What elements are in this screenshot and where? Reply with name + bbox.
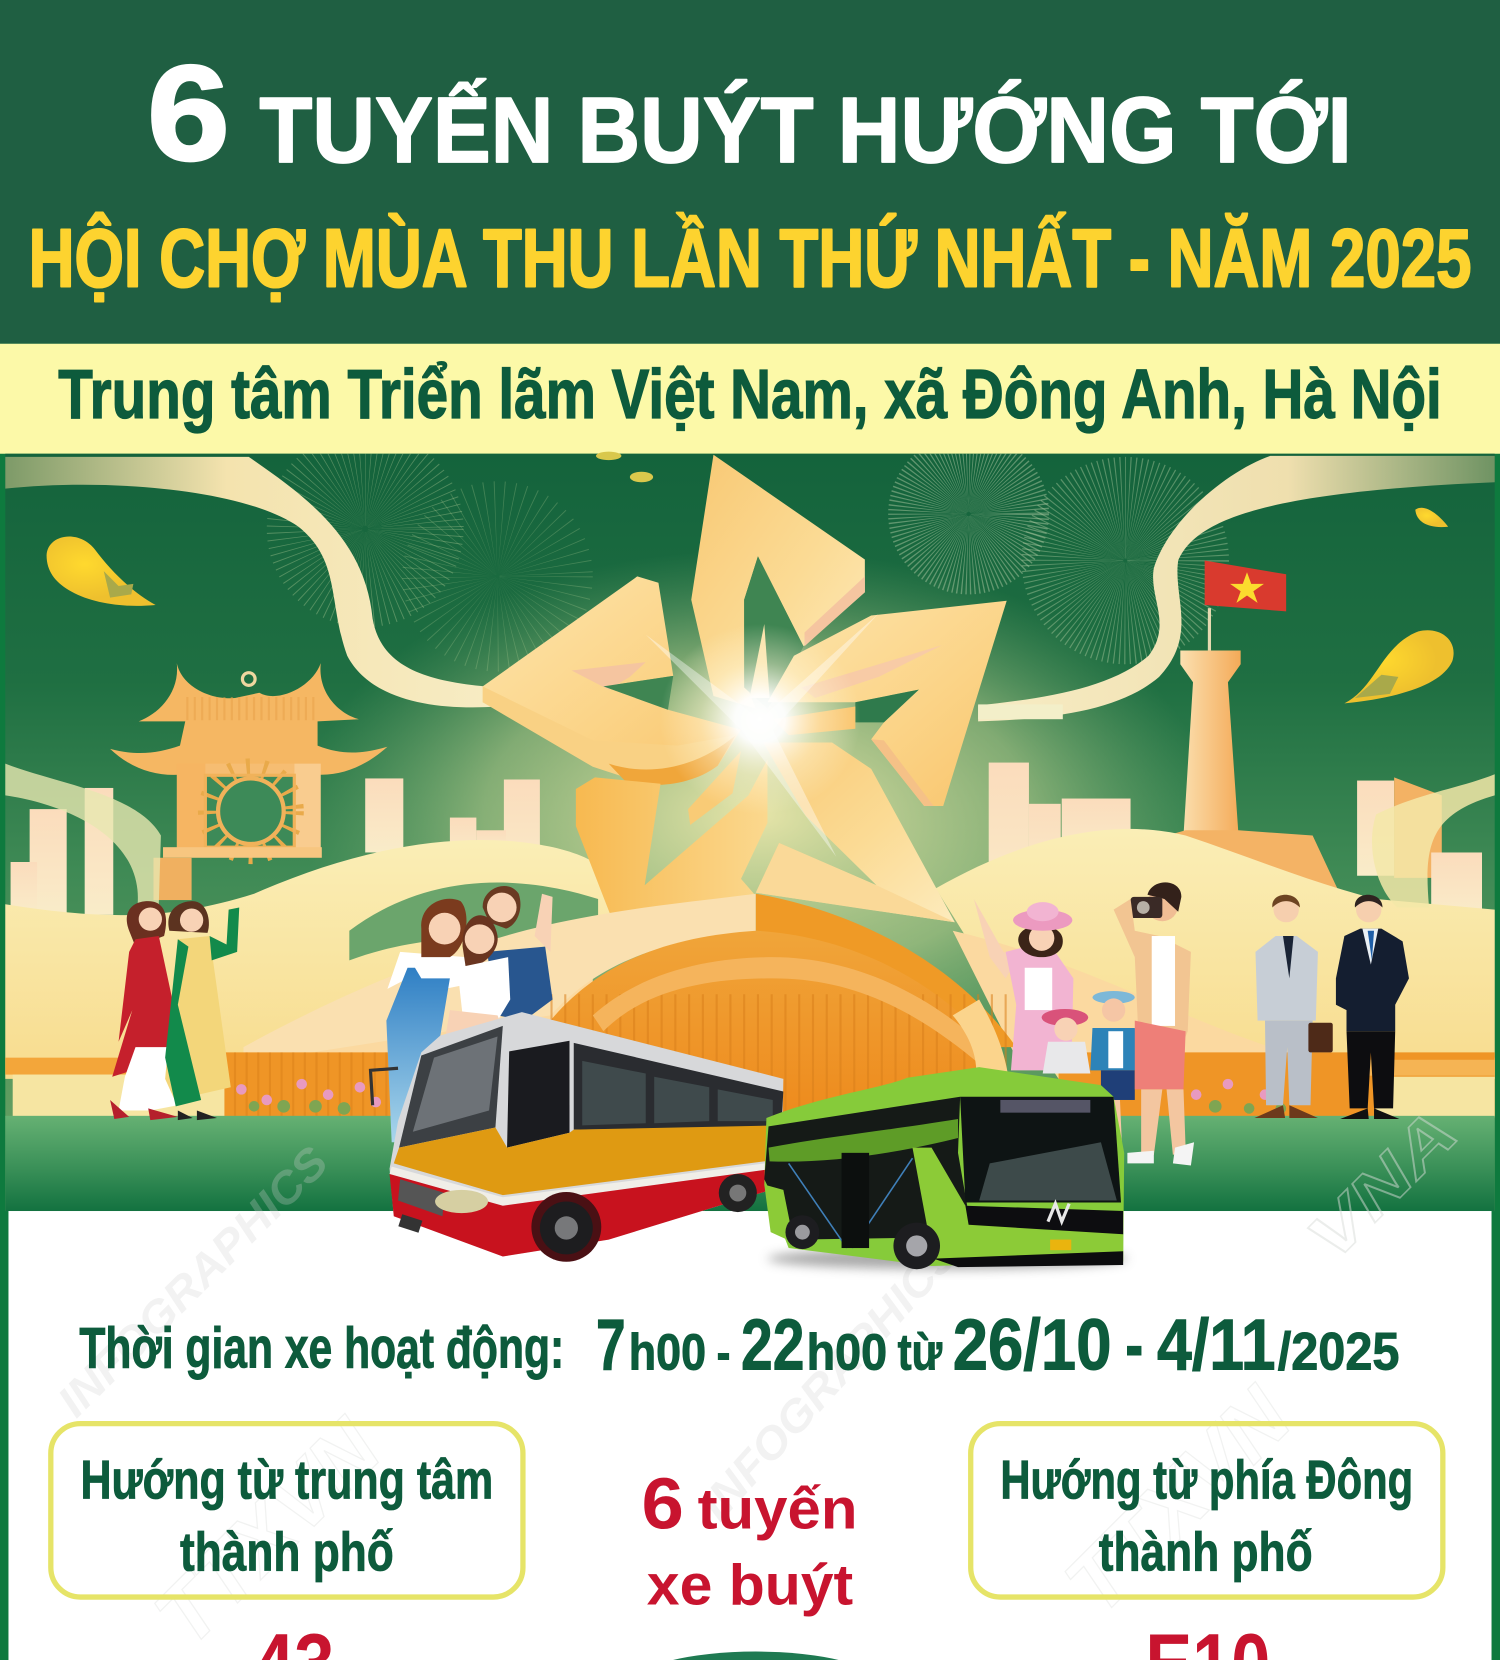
operating time line: 4/11 (1157, 1306, 1276, 1386)
operating time line: Thời gian xe hoạt động: (79, 1317, 564, 1381)
box: from east of city: thành phố (1099, 1521, 1313, 1583)
title: 6 (147, 37, 230, 189)
box: from city center: thành phố (180, 1521, 394, 1583)
watermark: TTXVN (136, 1400, 399, 1660)
watermark: INFOGRAPHICS (691, 1229, 968, 1530)
header band (0, 0, 1500, 344)
watermark: INFOGRAPHICS (49, 1137, 338, 1426)
watermark (49, 1097, 1471, 1660)
people: women in ao dai (110, 901, 239, 1120)
people: businessmen (1254, 895, 1409, 1119)
pale midground ribbons (5, 764, 1495, 1079)
falling leaves (47, 452, 1454, 703)
people: family (974, 899, 1141, 1158)
decorative ribbons top (5, 456, 1495, 721)
box: from city center (51, 1424, 523, 1597)
skyline buildings (11, 763, 1482, 921)
center label: 6 bus routes: xe buýt (647, 1553, 853, 1617)
people: selfie group (386, 886, 553, 1142)
operating time line: từ (898, 1324, 942, 1381)
watermark: TTXVN (1046, 1368, 1310, 1631)
green electric bus (764, 1067, 1127, 1269)
green badge top (634, 1652, 878, 1660)
subtitle band (0, 344, 1500, 454)
red bus (371, 1012, 783, 1262)
center label: 6 bus routes: 6 (641, 1464, 684, 1544)
box: from east of city (971, 1424, 1443, 1597)
operating time line: - (1125, 1306, 1143, 1386)
watermark: VNA (1294, 1097, 1471, 1274)
white content panel (8, 1211, 1492, 1660)
operating time line: - (717, 1324, 730, 1381)
center label: 6 bus routes: tuyến (698, 1477, 857, 1541)
title: TUYẾN BUÝT HƯỚNG TỚI (259, 78, 1352, 182)
operating time line: 22 (741, 1306, 805, 1386)
title (29, 37, 1471, 305)
ground (5, 1116, 1495, 1211)
center label: 6 bus routes (641, 1464, 857, 1617)
people: man with camera (1114, 882, 1194, 1166)
temple gate (110, 663, 387, 900)
illustration background (5, 454, 1495, 1211)
star flower emblem (483, 455, 1007, 922)
operating time line: /2025 (1278, 1323, 1399, 1382)
monument tower and flag (1149, 561, 1342, 899)
operating time line (79, 1306, 1399, 1386)
operating time line: 7 (596, 1306, 626, 1386)
flowers (236, 1079, 1302, 1115)
operating time line: h00 (629, 1324, 706, 1381)
operating time line: h00 (807, 1324, 887, 1381)
fireworks (314, 473, 1178, 625)
box: from city center: Hướng từ trung tâm (80, 1449, 493, 1511)
exhibition center building (5, 894, 1495, 1121)
operating time line: 26/10 (953, 1306, 1112, 1386)
